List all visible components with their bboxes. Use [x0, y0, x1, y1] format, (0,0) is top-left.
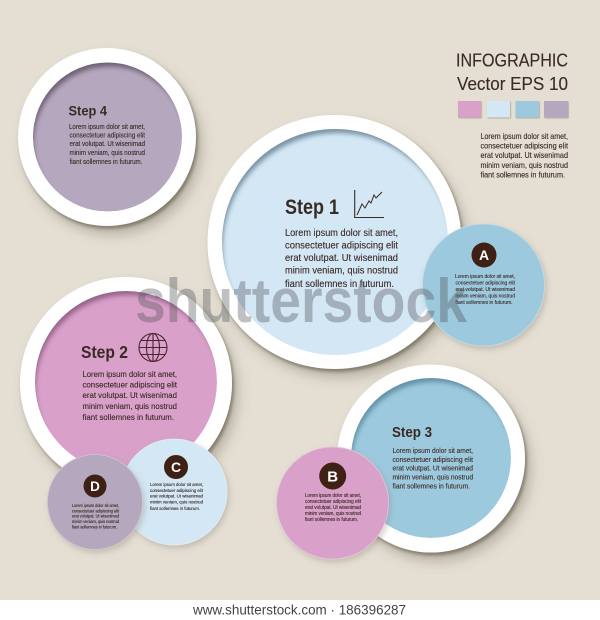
badge D: D [90, 479, 100, 494]
step 4 heading: Step 4 [68, 102, 107, 118]
step 1 text: minim veniam, quis nostrud [285, 266, 398, 276]
intro text: consectetuer adipiscing elit [480, 142, 569, 150]
step 1 white ring [208, 115, 462, 369]
intro text: fiant sollemnes in futurum. [480, 170, 565, 180]
disc B text: minim veniam, quis nostrud [305, 511, 361, 517]
step 1 text: erat volutpat. Ut wisenimad [285, 253, 398, 264]
step 1 text: Lorem ipsum dolor sit amet, [285, 228, 398, 239]
disc B text: erat volutpat. Ut wisenimad [305, 505, 361, 511]
watermark: shutterstock [135, 267, 467, 336]
title: INFOGRAPHIC [456, 50, 568, 70]
disc D text: fiant sollemnes in futurum. [72, 524, 117, 529]
panel: step 4 [18, 48, 196, 226]
step 3 text: Lorem ipsum dolor sit amet, [392, 446, 473, 455]
step 2 inset disc [35, 291, 217, 466]
colour swatches [458, 101, 568, 118]
step 3 text [392, 446, 474, 490]
step 1 text: consectetuer adipiscing elit [285, 240, 398, 252]
disc A text: consectetuer adipiscing elit [456, 280, 515, 286]
disc D text: Lorem ipsum dolor sit amet, [72, 503, 119, 508]
disc C text [150, 482, 204, 511]
disc C text: fiant sollemnes in futurum. [150, 506, 200, 511]
disc A [422, 224, 544, 346]
title: Vector EPS 10 [457, 73, 568, 94]
step 3 heading: Step 3 [392, 424, 432, 441]
disc A text [455, 274, 515, 306]
step 4 inset disc [33, 62, 182, 212]
disc D text: minim veniam, quis nostrud [72, 519, 120, 524]
step 3 white ring [337, 364, 525, 552]
disc D text: erat volutpat. Ut wisenimad [72, 514, 120, 519]
step 1 inset disc [222, 129, 448, 355]
step 3 text: consectetuer adipiscing elit [392, 455, 474, 464]
icon: line chart [355, 190, 384, 218]
step 3 text: erat volutpat. Ut wisenimad [392, 464, 473, 472]
step 2 white ring [20, 277, 232, 489]
step 4 text: consectetuer adipiscing elit [70, 130, 145, 140]
footer credit: www.shutterstock.com · 186396287 [192, 602, 406, 618]
step 2 text: erat volutpat. Ut wisenimad [82, 390, 177, 400]
panel: B [276, 447, 388, 559]
disc C text: erat volutpat. Ut wisenimad [150, 494, 203, 499]
disc D [48, 454, 142, 550]
disc B text: consectetuer adipiscing elit [305, 499, 362, 505]
disc B [276, 447, 388, 559]
panel: A [422, 224, 544, 346]
step 4 text: Lorem ipsum dolor sit amet, [69, 122, 145, 131]
disc B text [305, 493, 362, 523]
panel: step 3 [337, 364, 525, 552]
disc B text: fiant sollemnes in futurum. [305, 517, 358, 523]
badge B: B [327, 468, 338, 486]
intro text: minim veniam, quis nostrud [480, 161, 568, 170]
step 4 white ring [18, 48, 196, 226]
panel: C [121, 439, 227, 545]
disc B text: Lorem ipsum dolor sit amet, [305, 493, 361, 499]
panel: step 2 [20, 277, 232, 489]
disc C text: Lorem ipsum dolor sit amet, [150, 482, 203, 487]
step 1 text [285, 228, 398, 290]
step 3 inset disc [352, 378, 511, 538]
disc A text: Lorem ipsum dolor sit amet, [455, 274, 515, 280]
intro text [480, 132, 569, 180]
step 1 heading: Step 1 [285, 196, 339, 219]
badge A: A [479, 247, 489, 263]
title [456, 50, 568, 94]
disc D text: consectetuer adipiscing elit [72, 508, 120, 513]
step 4 text: fiant sollemnes in futurum. [70, 157, 142, 166]
step 3 text: minim veniam, quis nostrud [392, 472, 473, 482]
step 4 text: minim veniam, quis nostrud [70, 148, 145, 157]
step 2 text: fiant sollemnes in futurum. [82, 412, 174, 422]
panel: D [48, 454, 142, 550]
panel: step 1 [208, 115, 462, 370]
disc A text: erat volutpat. Ut wisenimad [456, 287, 515, 293]
step 2 text: consectetuer adipiscing elit [82, 380, 178, 390]
badge C: C [171, 459, 181, 475]
disc C text: minim veniam, quis nostrud [150, 500, 203, 505]
icon: globe [139, 334, 167, 362]
step 2 text: minim veniam, quis nostrud [82, 401, 177, 411]
disc C [121, 439, 227, 545]
step 2 heading: Step 2 [81, 342, 128, 362]
disc D text [72, 503, 120, 529]
step 2 text [82, 369, 178, 422]
step 4 text [69, 122, 145, 166]
step 2 text: Lorem ipsum dolor sit amet, [82, 369, 177, 379]
intro text: erat volutpat. Ut wisenimad [480, 151, 568, 160]
disc C text: consectetuer adipiscing elit [150, 488, 204, 493]
step 3 text: fiant sollemnes in futurum. [392, 482, 470, 490]
disc A text: minim veniam, quis nostrud [456, 294, 515, 300]
intro text: Lorem ipsum dolor sit amet, [480, 132, 568, 141]
step 1 text: fiant sollemnes in futurum. [285, 279, 394, 290]
disc A text: fiant sollemnes in futurum. [456, 300, 512, 306]
step 4 text: erat volutpat. Ut wisenimad [70, 139, 145, 148]
